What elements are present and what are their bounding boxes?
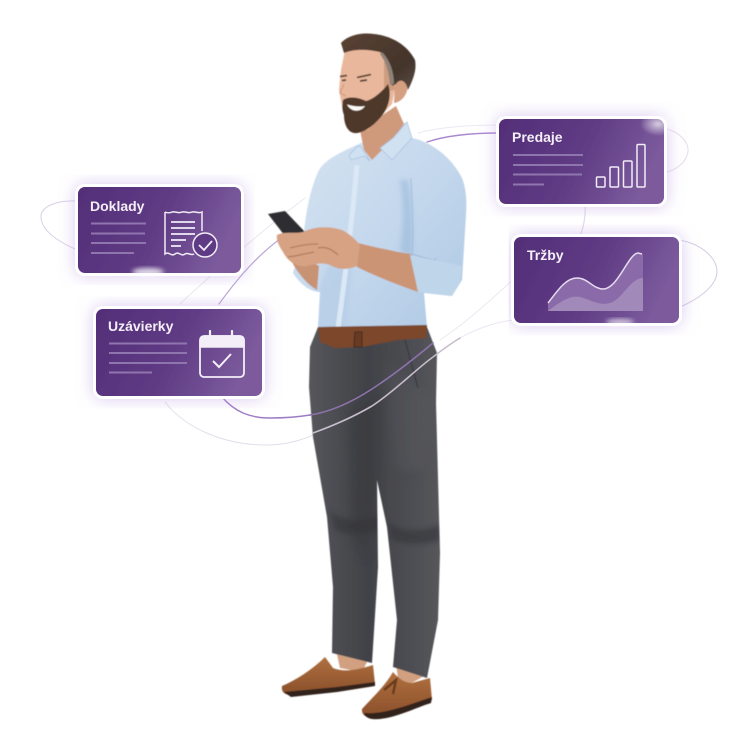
eyes (340, 74, 371, 78)
ear (394, 78, 408, 103)
temple grey (380, 52, 394, 85)
left forearm skin (292, 258, 319, 290)
face (339, 48, 396, 130)
nose (340, 84, 346, 96)
connector lines in front of the person (310, 338, 460, 433)
left sole (284, 682, 375, 697)
heading: Uzávierky: Uzávierky (108, 318, 174, 334)
left shoe (282, 657, 375, 695)
icon: area chart (548, 253, 643, 311)
left ankle (336, 650, 368, 672)
collar (349, 122, 412, 161)
phone (268, 211, 306, 240)
hair (341, 33, 416, 90)
belt (318, 325, 427, 348)
trousers (309, 327, 440, 678)
text placeholder lines (109, 344, 187, 372)
heading: Tržby: Tržby (527, 247, 564, 263)
trouser details (330, 340, 440, 560)
tassel (384, 680, 396, 694)
panel: Predaje (496, 112, 676, 207)
hands (277, 227, 360, 269)
icon: bar chart (596, 144, 645, 187)
highlight (606, 319, 634, 325)
panel: Doklady (75, 184, 244, 276)
right sole (364, 697, 432, 719)
heading: Predaje: Predaje (512, 129, 563, 145)
right ankle (396, 664, 424, 684)
panel: Tržby (511, 234, 682, 326)
icon: calendar with check (200, 331, 244, 377)
person (268, 33, 466, 719)
right shoe (362, 672, 432, 718)
icon: receipt with check (165, 212, 217, 257)
beard (342, 84, 390, 133)
connector lines behind the person (41, 125, 717, 445)
text placeholder lines (513, 155, 583, 184)
heading: Doklady: Doklady (90, 198, 145, 214)
neck (360, 106, 404, 160)
text placeholder lines (91, 224, 146, 253)
shirt shading (320, 165, 436, 327)
sleeve cuff (410, 255, 462, 296)
shirt (293, 122, 466, 332)
right forearm (357, 243, 418, 292)
belt loop (354, 332, 362, 347)
face shadow (384, 62, 395, 92)
smile (347, 104, 365, 111)
highlight (132, 268, 164, 276)
panel: Uzávierky (93, 306, 265, 399)
